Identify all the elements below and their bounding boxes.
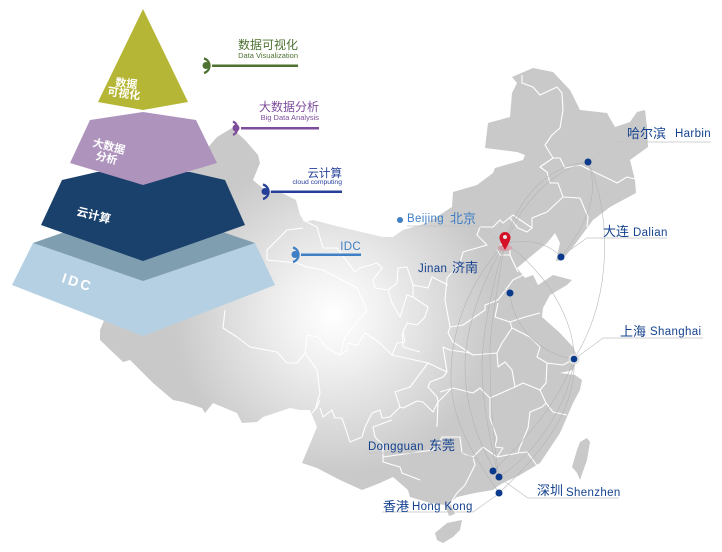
- pyramid: [12, 9, 275, 336]
- mainland: [100, 68, 648, 516]
- city: Dongguan: [367, 438, 496, 474]
- city: Shanghai: 上海: [620, 324, 646, 339]
- layer: cloud computing: [41, 172, 245, 261]
- city: Jinan: 济南: [452, 260, 478, 275]
- pyramid label: data visualization: 可视化: [107, 84, 141, 103]
- callout: cloud computing: 云计算: [308, 166, 342, 180]
- city: Jinan: [418, 260, 514, 296]
- city: Hong Kong: 香港: [383, 499, 409, 514]
- pyramid label: cloud computing: 云计算: [75, 204, 112, 226]
- city: Dalian: Dalian: [633, 227, 668, 239]
- city: Dongguan: 东莞: [429, 438, 455, 453]
- city: Harbin: 哈尔滨: [627, 126, 666, 141]
- city: Harbin: [584, 126, 711, 166]
- pyramid label: big data analysis: [91, 135, 127, 167]
- city: Beijing: Beijing: [407, 213, 444, 225]
- city: Dalian: [558, 224, 668, 260]
- island: Hainan: [435, 520, 462, 543]
- callout: IDC: IDC: [340, 241, 361, 253]
- map of China: [100, 68, 648, 543]
- callout: data visualization: [202, 37, 298, 73]
- city: Harbin: Harbin: [675, 128, 711, 140]
- city: Shenzhen: [496, 474, 621, 499]
- city: Hong Kong: [382, 490, 502, 514]
- city: Dongguan: Dongguan: [368, 441, 424, 453]
- callout: IDC: [292, 241, 361, 262]
- callout: data visualization: Data Visualization: [238, 51, 298, 60]
- city: Shanghai: Shanghai: [650, 326, 701, 338]
- pyramid label: IDC: IDC: [60, 270, 95, 295]
- city: Shanghai: [568, 324, 703, 364]
- city: Jinan: Jinan: [418, 263, 447, 275]
- city: Shenzhen: 深圳: [537, 483, 563, 498]
- pyramid label: data visualization: [107, 75, 141, 103]
- callout: cloud computing: [262, 166, 342, 199]
- city: Beijing: [397, 211, 500, 240]
- pyramid label: big data analysis: 大数据: [91, 135, 127, 157]
- callout: big data analysis: 大数据分析: [259, 99, 319, 114]
- city: Shenzhen: Shenzhen: [566, 487, 621, 499]
- icon: red location pin: [498, 232, 512, 251]
- city: Dalian: 大连: [603, 224, 629, 239]
- city: Beijing: 北京: [450, 211, 476, 226]
- province borders: [223, 75, 635, 507]
- pyramid label: big data analysis: 分析: [94, 148, 119, 167]
- layer: data visualization: [98, 9, 188, 110]
- layer: IDC: [12, 243, 275, 336]
- island: Taiwan: [572, 438, 590, 480]
- callout: big data analysis: Big Data Analysis: [261, 113, 319, 122]
- layer: big data analysis: [70, 112, 217, 185]
- flight arcs: [451, 162, 605, 493]
- city: Hong Kong: Hong Kong: [412, 501, 473, 513]
- callout: cloud computing: cloud computing: [292, 179, 342, 186]
- callout: big data analysis: [232, 99, 319, 135]
- callout: data visualization: 数据可视化: [238, 37, 298, 52]
- pyramid label: data visualization: 数据: [115, 75, 138, 91]
